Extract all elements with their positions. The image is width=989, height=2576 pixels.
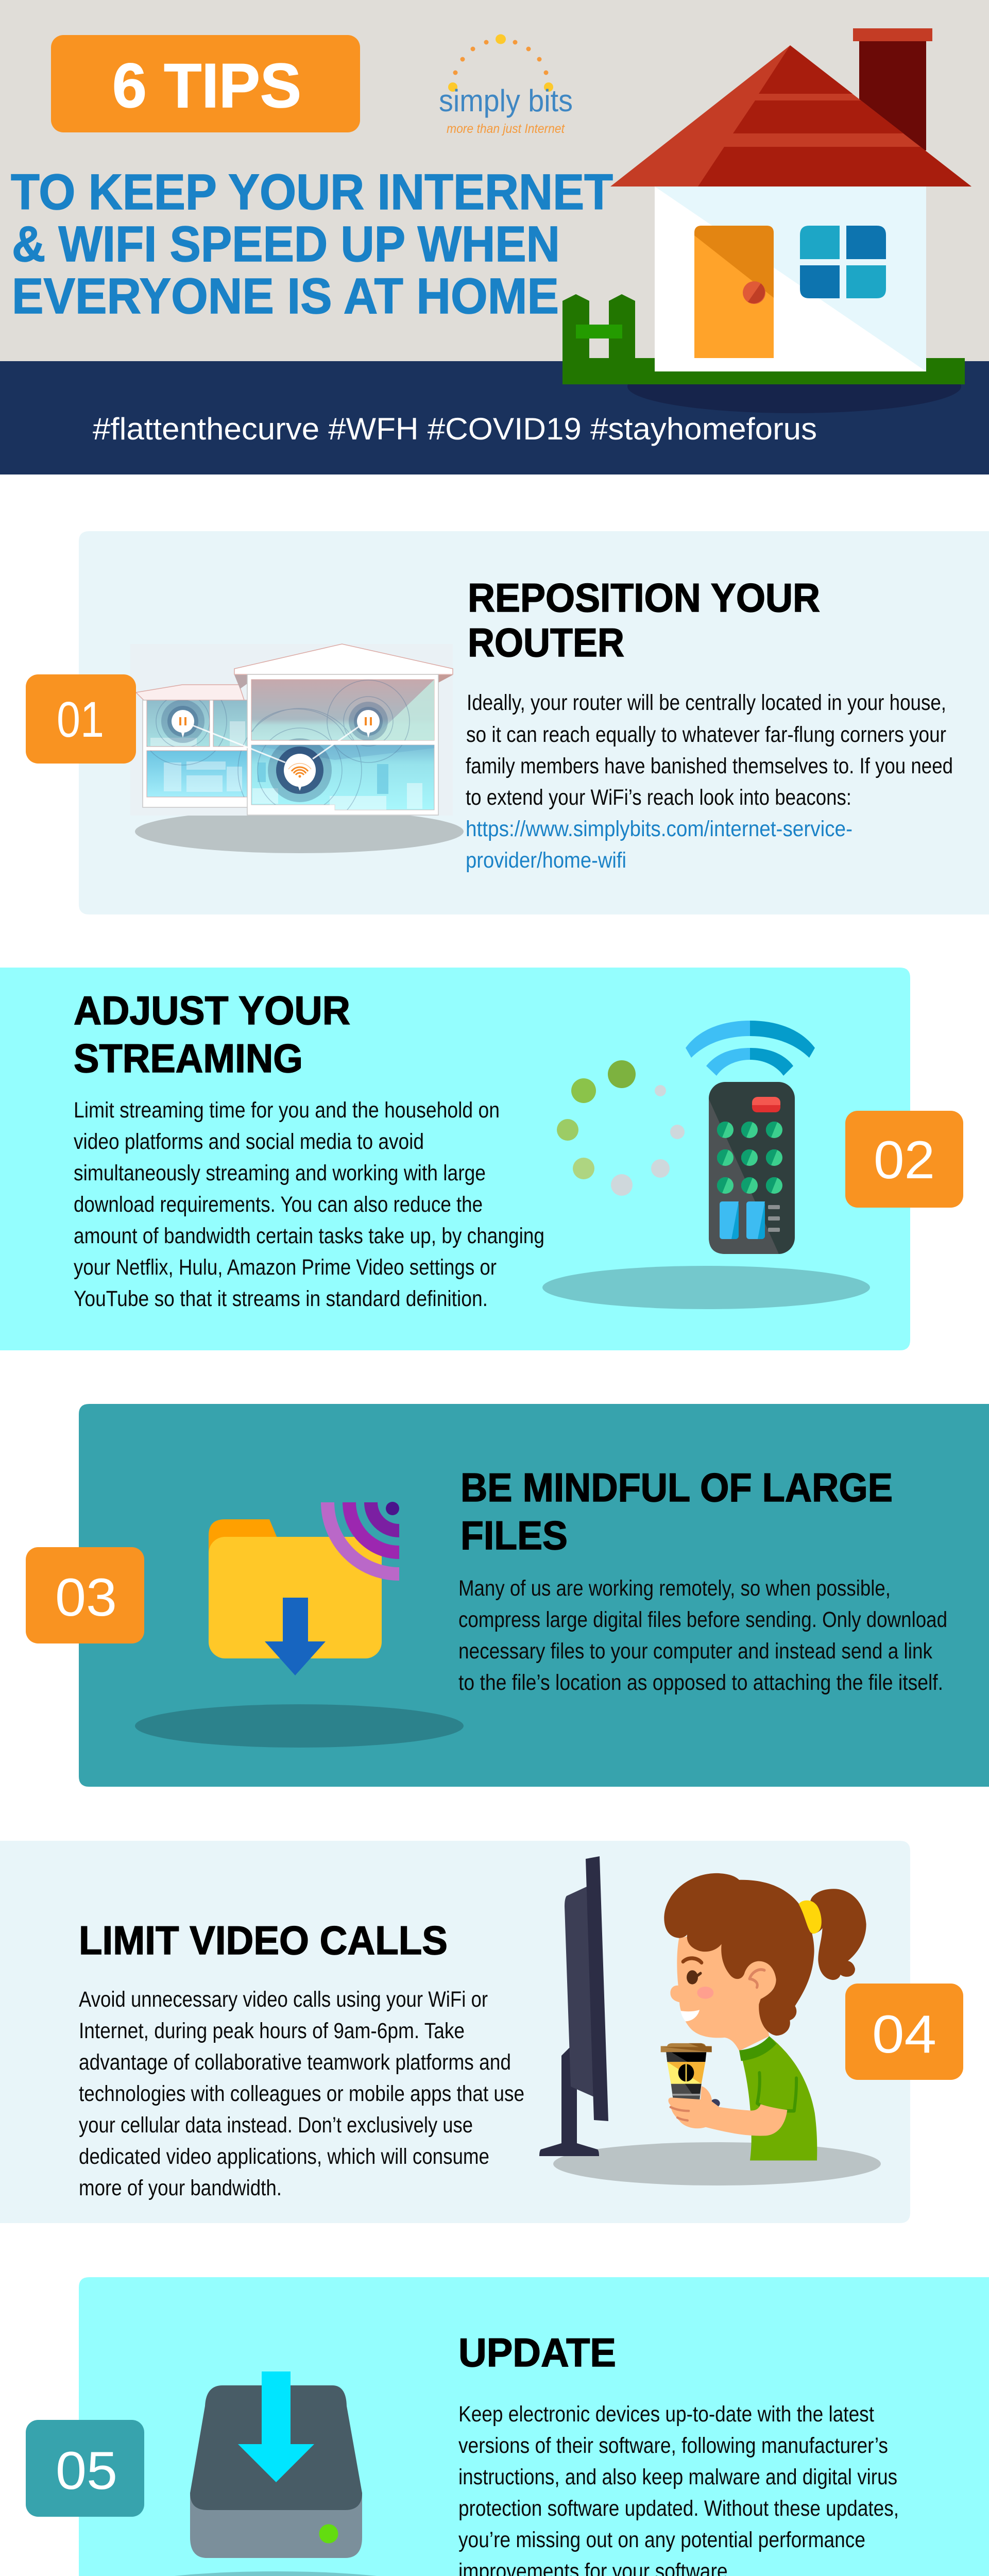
body text: https://www.simplybits.com/internet-service-	[466, 817, 852, 841]
heading: ROUTER	[468, 620, 624, 665]
panel: tip 5 update	[26, 2277, 989, 2576]
heading: FILES	[461, 1513, 568, 1558]
heading: UPDATE	[458, 2330, 616, 2375]
body text: Limit streaming time for you and the household on	[74, 1098, 500, 1123]
heading: BE MINDFUL OF LARGE	[461, 1465, 893, 1510]
panel: tip 3 be mindful of large files	[26, 1404, 989, 1787]
body text: more of your bandwidth.	[79, 2176, 282, 2200]
panel: tip 4 limit video calls	[0, 1841, 963, 2223]
logo: simply bits: more than just Internet	[447, 122, 565, 136]
heading: LIMIT VIDEO CALLS	[79, 1918, 448, 1963]
title: EVERYONE IS AT HOME	[12, 268, 559, 324]
badge 04	[845, 1984, 963, 2080]
badge 01	[26, 674, 136, 764]
body text: video platforms and social media to avoid	[74, 1129, 424, 1154]
body text	[74, 1098, 544, 1311]
heading	[74, 988, 350, 1081]
body text: amount of bandwidth certain tasks take up, by changing	[74, 1224, 544, 1248]
heading: REPOSITION YOUR	[468, 575, 820, 620]
badge 01: 01	[57, 691, 104, 748]
body text: Keep electronic devices up-to-date with the latest	[458, 2402, 874, 2427]
loading dots	[557, 1060, 685, 1196]
panel: tip 2 adjust your streaming	[0, 968, 963, 1350]
body text: to extend your WiFi’s reach look into beacons:	[466, 785, 851, 810]
body text: versions of their software, following manufacturer’s	[458, 2433, 888, 2458]
header section	[0, 0, 989, 474]
drive illustration	[112, 2371, 439, 2576]
girl with coffee illustration	[661, 1873, 866, 2160]
badge 03: 03	[55, 1568, 117, 1628]
body text: you’re missing out on any potential performance	[458, 2528, 865, 2552]
body text: provider/home-wifi	[466, 848, 626, 873]
title: TO KEEP YOUR INTERNET	[11, 164, 613, 220]
logo: simply bits: simply bits	[439, 83, 573, 118]
shadow	[553, 2142, 881, 2185]
house illustration	[562, 28, 971, 413]
heading: STREAMING	[74, 1036, 303, 1081]
badge 05	[26, 2420, 144, 2517]
wifi arcs	[686, 1021, 815, 1076]
folder illustration	[135, 1502, 464, 1748]
body text: YouTube so that it streams in standard definition.	[74, 1286, 488, 1311]
body text: Internet, during peak hours of 9am-6pm. Take	[79, 2019, 465, 2043]
badge 03	[26, 1547, 144, 1643]
heading	[468, 575, 820, 665]
remote control illustration	[542, 1021, 870, 1309]
body text: technologies with colleagues or mobile apps that use	[79, 2081, 524, 2106]
title: & WIFI SPEED UP WHEN	[12, 216, 560, 272]
title	[11, 164, 613, 324]
badge 02: 02	[874, 1130, 935, 1190]
heading: ADJUST YOUR	[74, 988, 350, 1033]
body text: Many of us are working remotely, so when possible,	[458, 1576, 891, 1601]
badge 02	[845, 1111, 963, 1208]
body text: instructions, and also keep malware and digital virus	[458, 2465, 897, 2489]
hashtags: #flattenthecurve #WFH #COVID19 #stayhomeforus	[93, 412, 817, 446]
heading	[461, 1465, 893, 1558]
monitor illustration	[539, 1856, 608, 2156]
body text: your Netflix, Hulu, Amazon Prime Video settings or	[74, 1255, 497, 1280]
body text: download requirements. You can also reduce the	[74, 1192, 483, 1217]
badge 05: 05	[56, 2441, 117, 2501]
body text	[79, 1987, 524, 2200]
body text	[458, 2402, 899, 2576]
body text: simultaneously streaming and working with large	[74, 1161, 486, 1185]
body text: Avoid unnecessary video calls using your WiFi or	[79, 1987, 488, 2012]
logo: simply bits	[439, 34, 573, 136]
badge: 6 tips: 6 TIPS	[112, 50, 301, 121]
body text: dedicated video applications, which will consume	[79, 2144, 489, 2169]
wifi rings	[328, 1502, 399, 1574]
body text	[458, 1576, 947, 1695]
badge 04: 04	[872, 2005, 936, 2064]
body text: advantage of collaborative teamwork platforms and	[79, 2050, 511, 2075]
panel: tip 1 reposition your router	[26, 531, 989, 914]
router house illustration	[130, 644, 464, 853]
body text: your cellular data instead. Don’t exclusively use	[79, 2113, 473, 2138]
coffee cup	[661, 2043, 712, 2099]
body text	[466, 690, 953, 873]
badge: 6 tips	[51, 35, 360, 132]
body text: protection software updated. Without these updates,	[458, 2496, 899, 2521]
